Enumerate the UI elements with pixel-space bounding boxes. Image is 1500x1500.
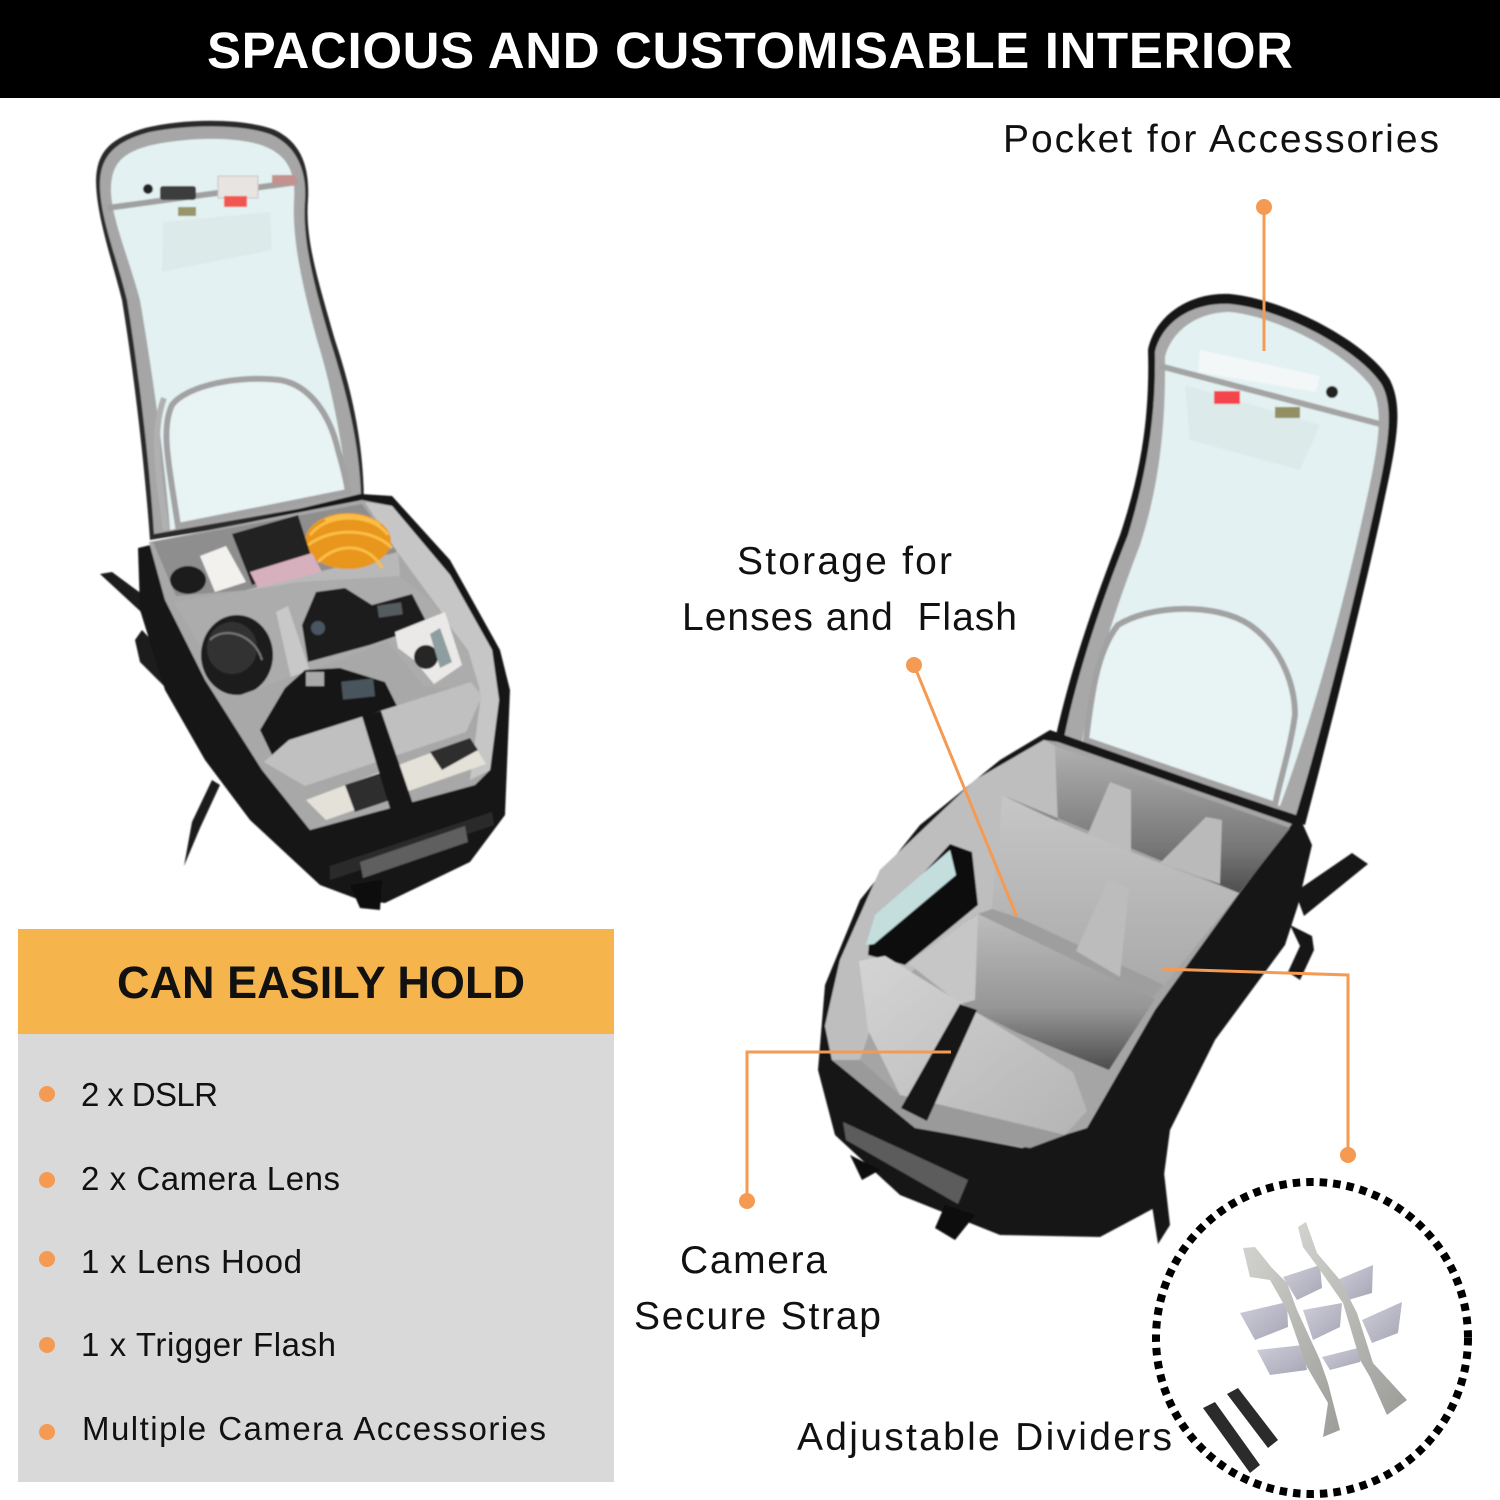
callout: camera secure strap [634,1052,951,1338]
panel list [18,1034,614,1482]
dark lens [201,615,273,695]
batteries and cards [170,515,322,594]
vertical divider [276,606,310,682]
side mesh pocket [866,844,978,965]
left backpack open lid [96,121,364,540]
mid small divider [1076,880,1129,977]
title banner: SPACIOUS AND CUSTOMISABLE INTERIOR [207,22,1293,79]
callout: camera secure strap: Camera [680,1239,827,1282]
left backpack photo: packed with gear [96,121,510,910]
front compartment wall [232,642,424,760]
floor strip [978,909,1164,1000]
left top handle [330,812,494,910]
right top handle [843,1122,975,1240]
white mirrorless camera [395,612,462,684]
left backpack body [138,494,510,903]
camera secure strap [362,711,413,815]
dotted circle with divider set [1156,1182,1468,1494]
callout: storage for lenses and flash: Storage for [737,540,952,583]
floor front [832,1060,1065,1148]
long divider wall [992,795,1239,985]
right lid lower pocket [1086,609,1295,805]
panel heading [18,929,614,1034]
left lid upper pocket with accessories [107,182,298,208]
divider cross pieces [1240,1265,1402,1375]
panel: can easily hold [18,929,614,1482]
camera body two [260,668,398,755]
front divider pad [264,682,482,786]
black velcro straps [1203,1388,1278,1473]
callout: pocket for accessories: Pocket for Accessories [1003,118,1439,161]
right backpack open lid [1055,294,1397,825]
centre compartment [908,914,1155,1070]
panel list: 1 x Lens Hood [81,1243,302,1280]
front divider pad [859,956,1087,1135]
left lid pocket shade [162,212,272,272]
right backpack shoulder straps [1138,853,1368,1244]
callout: camera secure strap: Secure Strap [634,1295,881,1338]
panel heading: CAN EASILY HOLD [117,957,525,1008]
rear compartment [1002,746,1290,893]
right backpack photo: empty with dividers [818,294,1397,1244]
panel list: Multiple Camera Accessories [82,1410,546,1447]
left backpack shoulder straps [100,572,220,866]
orange cable [305,513,392,569]
callout: storage for lenses and flash: Lenses and Flash [682,596,1017,639]
panel list: 2 x DSLR [81,1076,218,1113]
callout: adjustable dividers: Adjustable Dividers [797,1416,1172,1459]
panel list: 1 x Trigger Flash [81,1326,336,1363]
camera secure strap on right bag [901,1004,977,1121]
callout: pocket for accessories [1003,118,1439,351]
callout: storage for lenses and flash [682,540,1017,917]
middle compartment wall [174,576,480,698]
camera body one [302,588,428,662]
right lid upper pocket [1198,350,1320,392]
right backpack body [818,730,1312,1237]
title banner [0,0,1500,98]
callout: adjustable dividers [797,969,1356,1459]
right backpack grey interior [825,740,1292,1148]
back compartment wall [153,504,398,596]
right lid pocket shade [1185,385,1320,470]
divider long rails [1243,1222,1407,1437]
panel list: 2 x Camera Lens [81,1160,340,1197]
left lid lower pocket [166,379,348,526]
long white lens [306,738,486,820]
